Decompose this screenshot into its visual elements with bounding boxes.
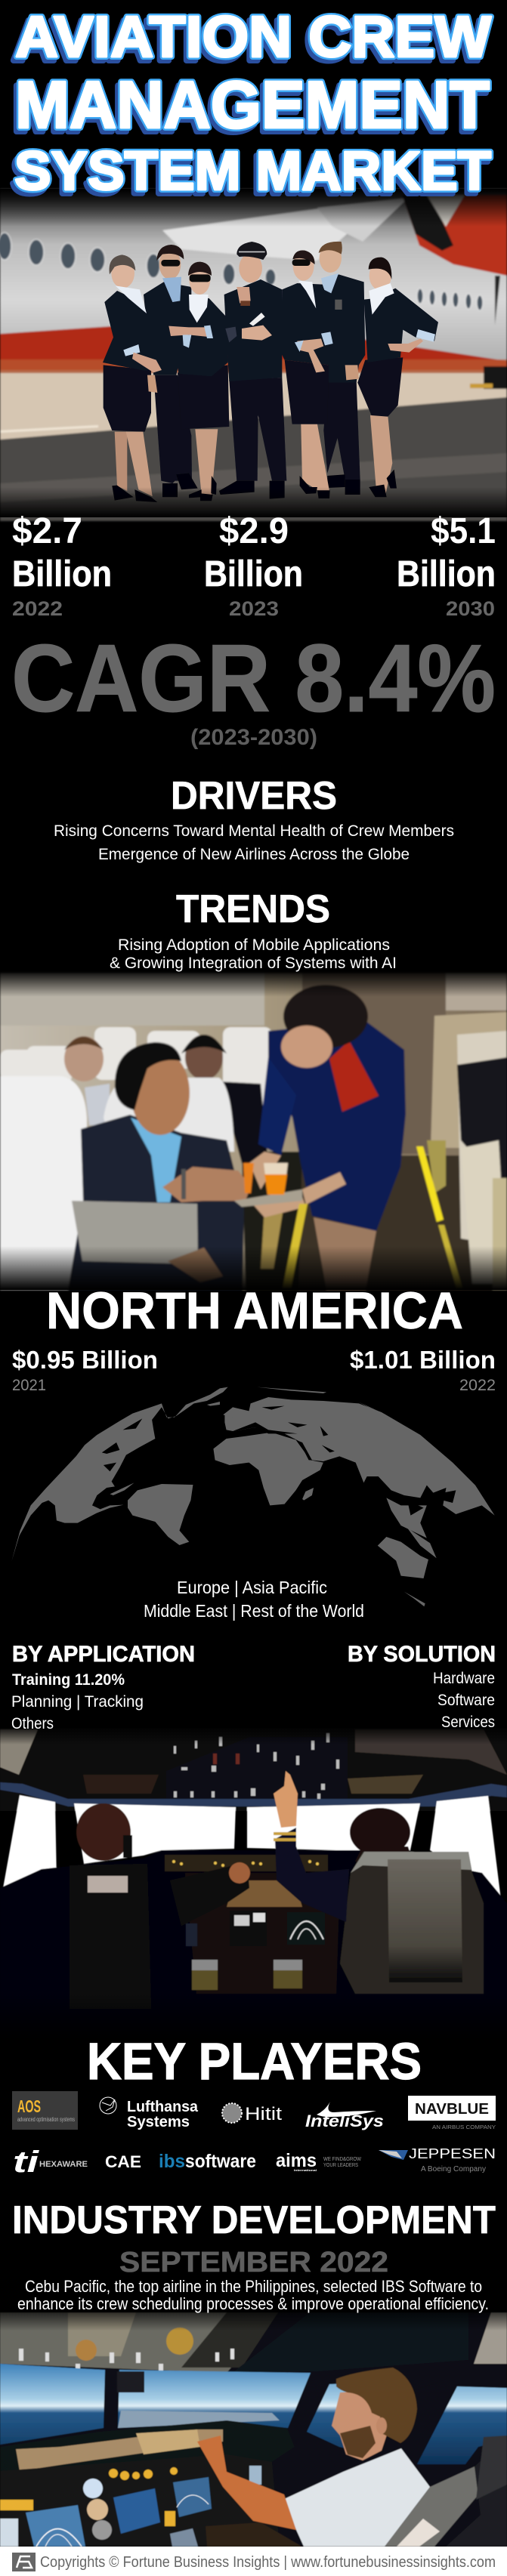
attendant	[249, 985, 406, 1290]
North America 2022 value: $1.01 Billion	[350, 1346, 496, 1374]
logo: IBS Software: software	[185, 2151, 256, 2172]
icon: Fortune Business Insights logo	[12, 2553, 36, 2571]
segment: by solution: BY SOLUTION	[348, 1642, 496, 1667]
logo: CAE: CAE	[105, 2152, 141, 2171]
woman first from left	[103, 255, 162, 502]
pilot	[197, 2368, 438, 2547]
North America 2021 value: $0.95 Billion	[12, 1346, 158, 1374]
logo: Lufthansa Systems	[100, 2097, 199, 2130]
logo: Lufthansa Systems: Lufthansa	[127, 2099, 199, 2115]
logo: IBS Software: ibs	[159, 2151, 185, 2172]
seat behind passenger	[104, 1078, 234, 1152]
man second from left	[144, 245, 198, 497]
logo: AOS: AOS	[17, 2096, 41, 2116]
title: SYSTEM MARKET	[11, 145, 488, 205]
front seat left	[0, 1076, 87, 1290]
aisle light strips	[283, 1146, 462, 1288]
logo: AOS: advanced optimisation systems	[17, 2116, 75, 2123]
South America	[128, 1484, 193, 1545]
woman third from left	[168, 262, 229, 501]
globe map	[11, 1387, 495, 1606]
drivers text: Rising Concerns Toward Mental Health of Crew Members	[54, 822, 454, 840]
stat: 2023 market size: $2.9	[219, 511, 289, 551]
logo: AIMS International: YOUR LEADERS	[323, 2161, 358, 2168]
lower panel	[0, 2454, 280, 2547]
title: AVIATION CREW	[15, 5, 491, 69]
title: AVIATION CREW	[12, 8, 488, 73]
North America 2022 value: 2022	[459, 1377, 496, 1394]
stat: 2023 market size: 2023	[229, 597, 279, 620]
Eurasia	[224, 1397, 495, 1516]
lower cockpit dark mass	[0, 1850, 507, 2039]
logo: IBS Software	[159, 2151, 256, 2172]
heading: key players: KEY PLAYERS	[87, 2032, 422, 2090]
stat: 2030 market size: 2030	[446, 597, 495, 620]
logo: AIMS International: International	[294, 2168, 317, 2172]
logo: IntelliSys: InteliSys	[305, 2112, 384, 2130]
heading: trends: TRENDS	[176, 887, 330, 931]
pilot seat	[385, 2436, 507, 2547]
logo: AIMS International: aims	[276, 2150, 317, 2171]
heading: drivers: DRIVERS	[171, 774, 337, 818]
North America 2021 value: 2021	[12, 1377, 46, 1394]
Madagascar	[302, 1488, 314, 1501]
footer bar	[0, 2547, 507, 2576]
glare panel	[165, 1855, 328, 1871]
male pilot	[219, 242, 286, 499]
passenger	[68, 1042, 251, 1290]
logo: Lufthansa Systems: Systems	[127, 2114, 190, 2130]
sky windows	[0, 2364, 507, 2464]
man sixth from left	[319, 242, 365, 495]
trends text	[110, 936, 397, 972]
title	[11, 5, 491, 205]
development date: SEPTEMBER 2022	[119, 2247, 388, 2278]
title: AVIATION CREW	[15, 5, 491, 69]
logo: NAVBLUE	[408, 2096, 496, 2130]
woman fifth from left	[281, 250, 336, 498]
logo: Hexaware: HEXAWARE	[39, 2160, 88, 2169]
logo: Hexaware	[13, 2146, 88, 2179]
woman seventh from left	[357, 258, 438, 497]
logo: AOS	[12, 2091, 78, 2130]
stat: 2022 market size: $2.7	[12, 511, 82, 551]
trends text: & Growing Integration of Systems with AI	[110, 955, 397, 972]
segment: by solution	[348, 1642, 496, 1731]
Southeast Asia islands	[386, 1498, 427, 1538]
development text	[17, 2277, 489, 2313]
cockpit photo: two pilots at overhead panel	[0, 1725, 507, 2039]
segment: by application: BY APPLICATION	[12, 1642, 195, 1667]
segment: by application: Training 11.20%	[12, 1671, 125, 1689]
glareshield and MCP	[0, 2420, 295, 2492]
raised arm	[274, 1771, 349, 1922]
right pilot	[340, 1808, 484, 1994]
logo: Hitit: Hitit	[245, 2104, 282, 2124]
segment: by solution: Hardware	[433, 1670, 495, 1687]
stat: 2022 market size: Billion	[12, 554, 112, 594]
logo: NAVBLUE: AN AIRBUS COMPANY	[432, 2124, 496, 2130]
logo: Hitit	[222, 2103, 282, 2124]
title: MANAGEMENT	[15, 67, 490, 142]
logo: IntelliSys	[305, 2102, 384, 2130]
logo: Jeppesen	[379, 2146, 496, 2173]
logo: Jeppesen: JEPPESEN	[409, 2146, 496, 2161]
title: MANAGEMENT	[15, 67, 490, 142]
Arctic islands	[257, 1387, 326, 1393]
stat: 2023 market size	[204, 511, 303, 620]
crew group	[103, 242, 438, 502]
background passengers	[64, 1035, 268, 1163]
drink tray	[234, 1163, 302, 1207]
cockpit photo: pilot at controls	[0, 2303, 507, 2547]
heading: industry development: INDUSTRY DEVELOPMENT	[12, 2198, 496, 2242]
trends text: Rising Adoption of Mobile Applications	[118, 936, 390, 954]
other regions list: Europe | Asia Pacific	[177, 1578, 327, 1597]
logo: Hexaware: ti	[13, 2146, 39, 2179]
logo: NAVBLUE: NAVBLUE	[415, 2101, 489, 2118]
title: SYSTEM MARKET	[14, 141, 491, 202]
stat: 2022 market size	[12, 511, 112, 620]
segment: by solution: Software	[437, 1692, 495, 1709]
title: SYSTEM MARKET	[14, 141, 491, 202]
Australia	[378, 1537, 428, 1578]
CAGR period: (2023-2030)	[190, 725, 317, 750]
stat: 2023 market size: Billion	[204, 554, 303, 594]
logo: AIMS International: WE FIND&GROW	[323, 2155, 362, 2162]
segment: by application	[11, 1642, 195, 1732]
other regions list: Middle East | Rest of the World	[144, 1601, 364, 1621]
segment: by solution: Services	[441, 1714, 495, 1731]
segment: by application: Others	[11, 1715, 54, 1732]
North America and Greenland	[11, 1387, 228, 1561]
Caribbean	[110, 1482, 134, 1495]
drivers text: Emergence of New Airlines Across the Globe	[98, 846, 410, 863]
title: MANAGEMENT	[12, 71, 487, 146]
stat: 2030 market size: Billion	[397, 554, 496, 594]
left pilot	[70, 1803, 250, 2009]
right roof	[234, 2312, 507, 2371]
logo: AIMS International	[276, 2150, 362, 2172]
overhead panel	[0, 2312, 278, 2374]
centre pedestal	[185, 1873, 340, 1994]
segment: by application: Planning | Tracking	[11, 1693, 144, 1711]
cabin photo: flight attendant serving passenger	[0, 970, 507, 1290]
North America 2022 value	[350, 1346, 496, 1394]
New Zealand	[404, 1592, 425, 1606]
windshield windows	[3, 1795, 501, 1899]
heading: North America: NORTH AMERICA	[46, 1282, 463, 1340]
stat: 2030 market size: $5.1	[431, 511, 496, 551]
North America 2021 value	[12, 1346, 158, 1394]
Africa	[213, 1433, 323, 1505]
background seats	[0, 1027, 272, 1125]
other regions list	[144, 1578, 364, 1621]
stat: 2030 market size	[397, 511, 496, 620]
drivers text	[54, 822, 454, 863]
stat: 2022 market size: 2022	[12, 597, 63, 620]
hero photo: flight crew in front of aircraft	[0, 189, 507, 521]
logo: Jeppesen: A Boeing Company	[421, 2165, 486, 2173]
